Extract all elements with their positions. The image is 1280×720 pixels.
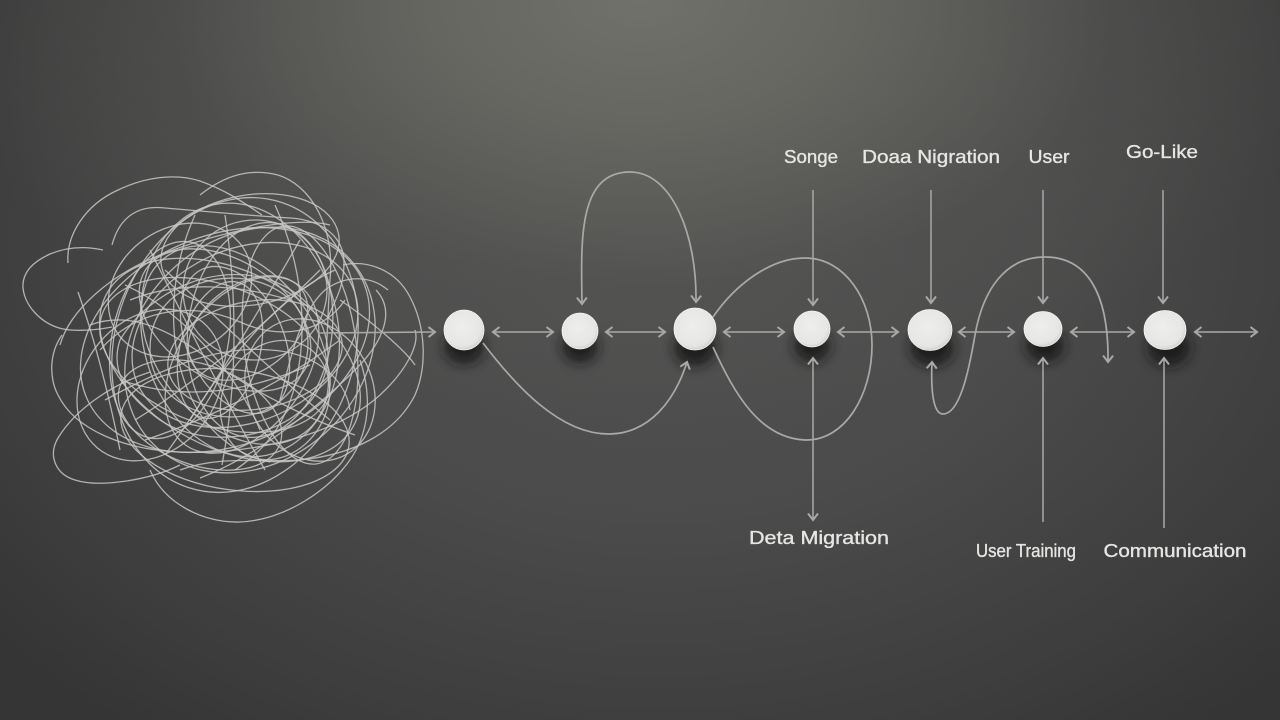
vertical arrows from top labels	[813, 190, 1163, 305]
label: Data Migration top: Doaa Nigration	[862, 147, 1000, 167]
curved connector: S curve across nodes 5 and 6	[932, 257, 1108, 414]
horizontal double arrows	[493, 331, 1257, 333]
label: User Training: User Training	[976, 541, 1076, 561]
curved connector: loop around node 4	[713, 258, 872, 440]
curved connector: under node 2	[483, 343, 687, 434]
label: Go-Live: Go-Like	[1126, 142, 1198, 162]
label: Communication: Communication	[1104, 541, 1246, 561]
tangled scribble	[23, 165, 425, 525]
curved connector: loop over node 2	[582, 172, 696, 304]
label: Data Migration bottom: Deta Migration	[749, 528, 889, 548]
label: Songe: Songe	[784, 147, 838, 167]
process nodes	[444, 308, 1186, 350]
exit arrow from tangle	[318, 332, 435, 333]
vertical arrows from bottom labels	[813, 358, 1164, 528]
node shadows	[444, 330, 1190, 366]
label: User: User	[1028, 147, 1070, 167]
